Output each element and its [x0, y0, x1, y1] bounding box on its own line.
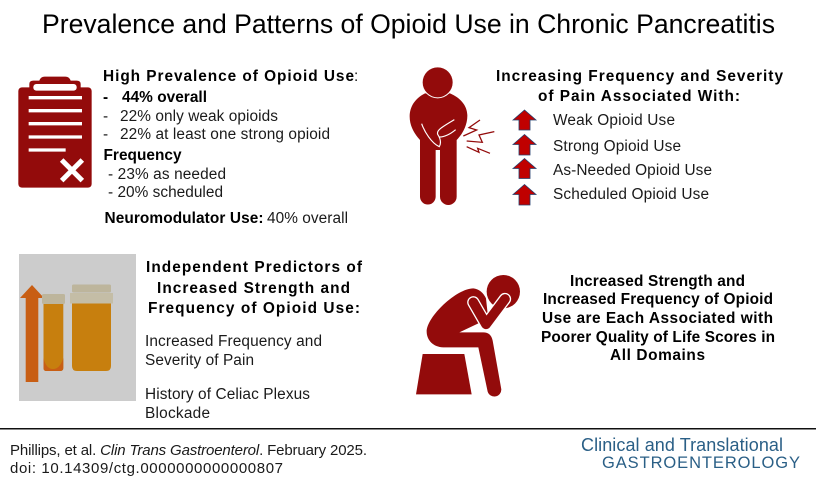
row: weak opioid use: Weak Opioid Use — [553, 112, 675, 129]
heading: pain association — [496, 68, 783, 105]
row: scheduled opioid use: Scheduled Opioid Use — [553, 186, 709, 203]
citation: Phillips, et al. Clin Trans Gastroenterol. February 2025. — [10, 442, 367, 459]
row: strong opioid use — [513, 134, 681, 155]
stat: neuromodulator use — [104, 210, 348, 227]
stat: weak opioids: 22% only weak opioids — [120, 108, 278, 125]
stat: strong opioid: - — [103, 126, 108, 143]
predictor: pain: Increased Frequency and — [145, 333, 322, 350]
row: as-needed opioid use: As-Needed Opioid Use — [553, 162, 712, 179]
row: as-needed opioid use — [513, 158, 712, 179]
stat: as needed: - 23% as needed — [108, 166, 226, 183]
title: Prevalence and Patterns of Opioid Use in Chronic Pancreatitis — [42, 9, 775, 39]
row: scheduled opioid use — [513, 184, 709, 205]
panel: prevalence — [18, 68, 358, 227]
footer — [0, 428, 816, 477]
stat: strong opioid: 22% at least one strong opioid — [120, 126, 330, 143]
panel: quality of life — [416, 273, 775, 397]
panel: independent predictors — [19, 254, 363, 422]
stat: weak opioids: - — [103, 108, 108, 125]
heading: independent predictors: Increased Strength and — [157, 280, 350, 297]
predictor: celiac plexus blockade: Blockade — [145, 405, 210, 422]
icon: seated person with head in hands — [416, 275, 520, 397]
heading: pain association: of Pain Associated With: — [538, 88, 740, 105]
journal logo: Clinical and Translational — [581, 435, 783, 455]
heading: independent predictors — [146, 259, 363, 317]
journal logo — [581, 435, 800, 472]
predictor: celiac plexus blockade: History of Celiac Plexus — [145, 386, 310, 403]
predictor: celiac plexus blockade — [145, 386, 310, 422]
journal logo: GASTROENTEROLOGY — [602, 454, 800, 472]
heading colon: : — [354, 68, 358, 85]
predictor: pain: Severity of Pain — [145, 352, 254, 369]
heading: independent predictors: Independent Predictors of — [146, 259, 363, 276]
heading: independent predictors: Frequency of Opioid Use: — [148, 300, 360, 317]
text: quality of life finding: Increased Frequency of Opioid — [543, 291, 773, 308]
text: quality of life finding: Use are Each Associated with — [542, 310, 773, 327]
stat: neuromodulator use: 40% overall — [267, 210, 348, 227]
stat: neuromodulator use: Neuromodulator Use: — [104, 210, 264, 227]
citation — [10, 442, 367, 477]
text: quality of life finding — [541, 273, 775, 364]
heading: frequency: Frequency — [104, 147, 182, 164]
icon: person with abdominal pain — [410, 66, 494, 205]
heading: pain association: Increasing Frequency and Severity — [496, 68, 783, 85]
icon: pill bottles with rising arrow — [19, 254, 136, 401]
predictor: pain — [145, 333, 322, 369]
text: quality of life finding: Poorer Quality of Life Scores in — [541, 329, 775, 346]
panel: pain association — [410, 66, 783, 205]
text: quality of life finding: All Domains — [610, 347, 705, 364]
icon: clipboard — [18, 77, 92, 188]
stat: scheduled: - 20% scheduled — [108, 184, 223, 201]
stat: overall: 44% overall — [122, 89, 207, 106]
stat: overall: - — [103, 89, 108, 106]
row: weak opioid use — [513, 110, 675, 130]
citation: doi: 10.14309/ctg.0000000000000807 — [10, 460, 283, 477]
text: quality of life finding: Increased Strength and — [570, 273, 745, 290]
row: strong opioid use: Strong Opioid Use — [553, 138, 681, 155]
heading: high prevalence: High Prevalence of Opioid Use — [103, 68, 354, 85]
